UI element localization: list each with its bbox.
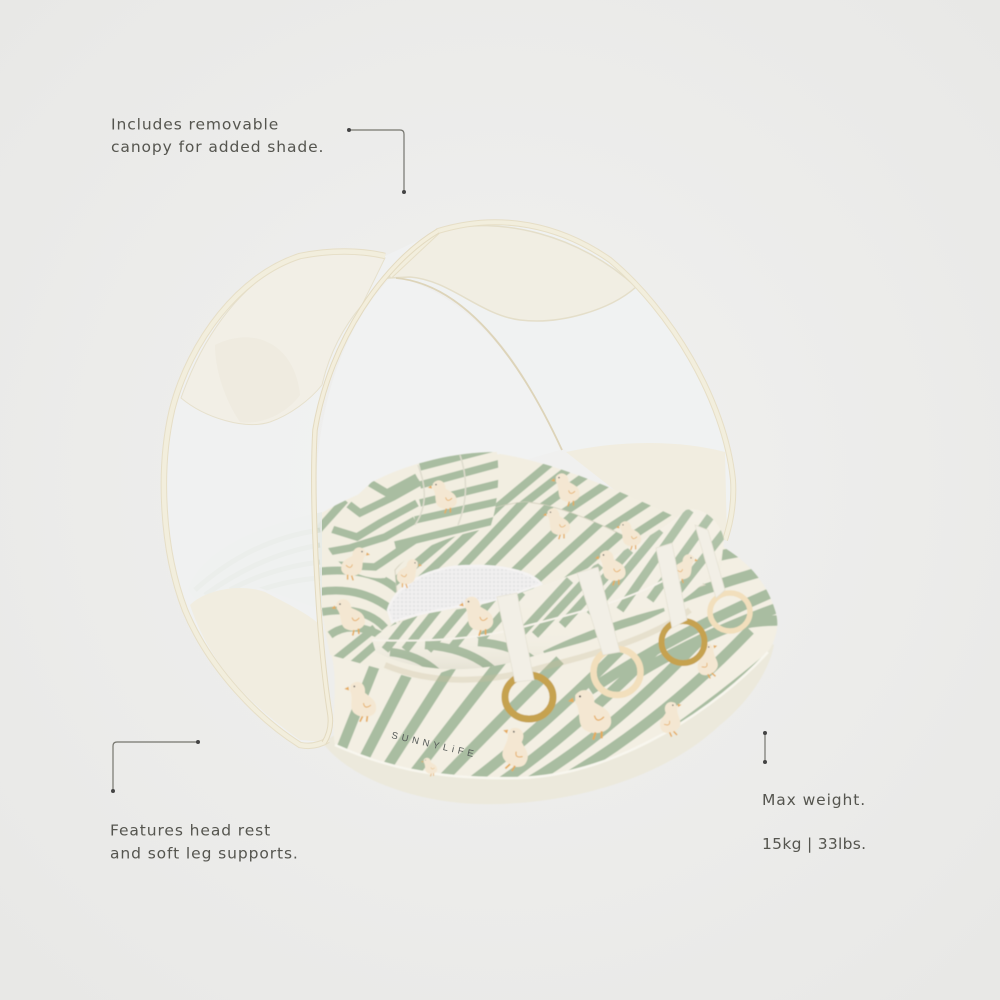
callout: head rest: and soft leg supports.	[110, 844, 299, 862]
panel fold	[215, 337, 300, 423]
back bottom panel	[566, 443, 727, 540]
left mesh	[164, 231, 438, 746]
shadow under leg ring	[385, 610, 690, 680]
front hoop	[314, 231, 438, 743]
weight leader	[763, 731, 767, 764]
base	[322, 600, 774, 804]
left top panel	[181, 252, 385, 425]
callout: canopy	[111, 116, 406, 194]
straps	[497, 525, 725, 682]
ring 1	[505, 675, 553, 719]
ghost ring through mesh	[317, 512, 322, 610]
canopy front shell	[164, 231, 438, 746]
main ring	[332, 548, 778, 780]
outer hoop	[164, 252, 385, 746]
canopy back shell	[316, 222, 733, 540]
back mesh	[400, 222, 733, 540]
ducks	[331, 473, 730, 776]
back arch	[396, 278, 562, 450]
callout: max weight: 15kg | 33lbs.	[762, 835, 866, 853]
head rest leader	[111, 740, 200, 793]
mesh seat	[388, 566, 541, 622]
ring 3	[662, 621, 704, 663]
wooden rings	[505, 593, 750, 719]
callout: head rest	[110, 740, 299, 862]
callout: max weight	[762, 731, 866, 853]
weight text: Max weight.	[762, 791, 866, 809]
inner seat tube	[395, 502, 705, 630]
ring 4	[710, 593, 750, 631]
leg ring	[372, 509, 730, 675]
brand mark: SUNNYLiFE	[390, 730, 478, 761]
left bottom panel	[190, 588, 330, 742]
headrest	[328, 452, 499, 579]
back hoop	[390, 222, 733, 540]
seat tube	[313, 454, 725, 680]
opening	[316, 278, 560, 520]
ring 2	[594, 649, 640, 695]
float	[313, 445, 800, 804]
back top panel	[388, 226, 636, 321]
callout: canopy: canopy for added shade.	[111, 138, 324, 156]
canopy leader	[347, 128, 406, 194]
head rest text: Features head rest	[110, 822, 271, 840]
canopy text: Includes removable	[111, 116, 279, 134]
